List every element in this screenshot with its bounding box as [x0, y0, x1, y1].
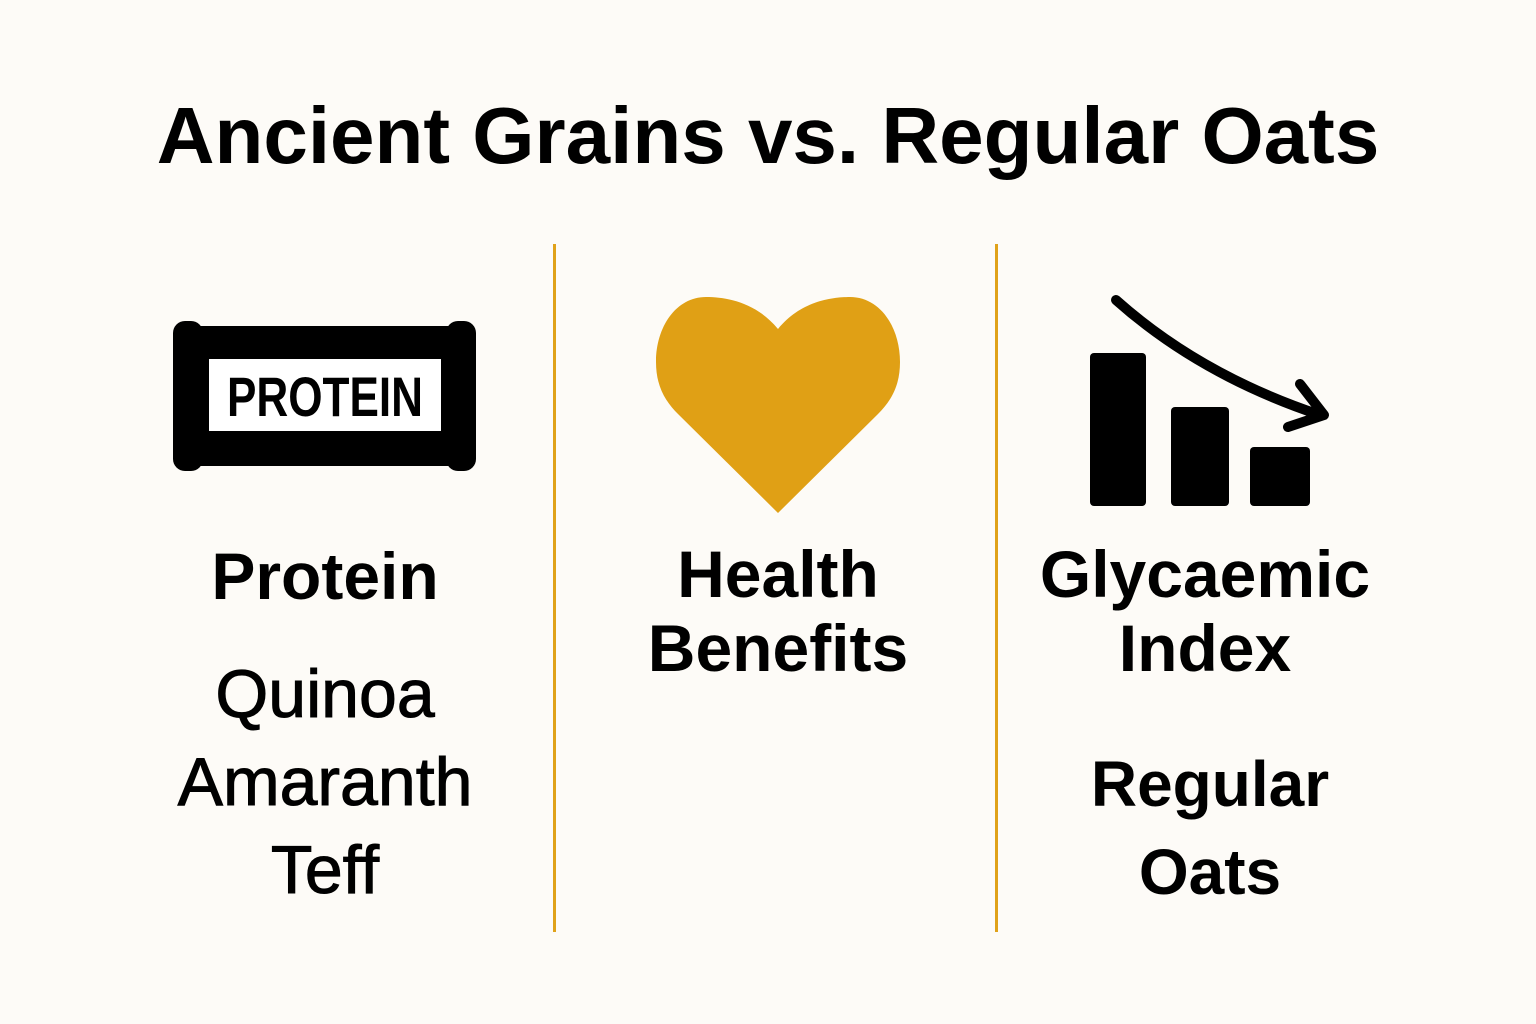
text: Regular Oats: [1091, 748, 1329, 908]
title: Ancient Grains vs. Regular Oats: [157, 91, 1379, 180]
heading: Health Benefits: [648, 537, 908, 685]
heading: Glycaemic Index: Glycaemic: [1040, 537, 1370, 611]
list: ancient grains: Teff: [271, 832, 379, 908]
heading: Glycaemic Index: [1040, 537, 1370, 685]
icon: protein bar: [173, 321, 476, 471]
icon: heart: [656, 297, 900, 513]
heading: Glycaemic Index: Index: [1119, 611, 1291, 685]
icon: protein bar: PROTEIN: [227, 365, 423, 428]
text: Regular Oats: Oats: [1139, 836, 1281, 908]
heading: Protein: Protein: [211, 539, 439, 613]
panel: protein: [173, 321, 476, 908]
panel: glycaemic index: [1040, 295, 1370, 908]
heading: Health Benefits: Benefits: [648, 611, 908, 685]
icon: bar chart with down arrow: [1090, 295, 1329, 506]
panel: health benefits: [648, 297, 908, 685]
list: ancient grains: [177, 656, 472, 908]
list: ancient grains: Quinoa: [215, 656, 435, 732]
heading: Health Benefits: Health: [677, 537, 879, 611]
text: Regular Oats: Regular: [1091, 748, 1329, 820]
list: ancient grains: Amaranth: [178, 744, 472, 820]
